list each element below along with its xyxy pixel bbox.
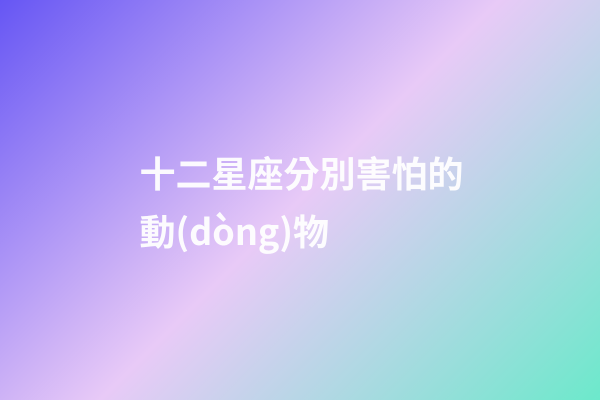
title: 動(dòng)物 — [140, 204, 329, 256]
title — [140, 146, 464, 256]
title: 十二星座分別害怕的 — [140, 146, 464, 198]
